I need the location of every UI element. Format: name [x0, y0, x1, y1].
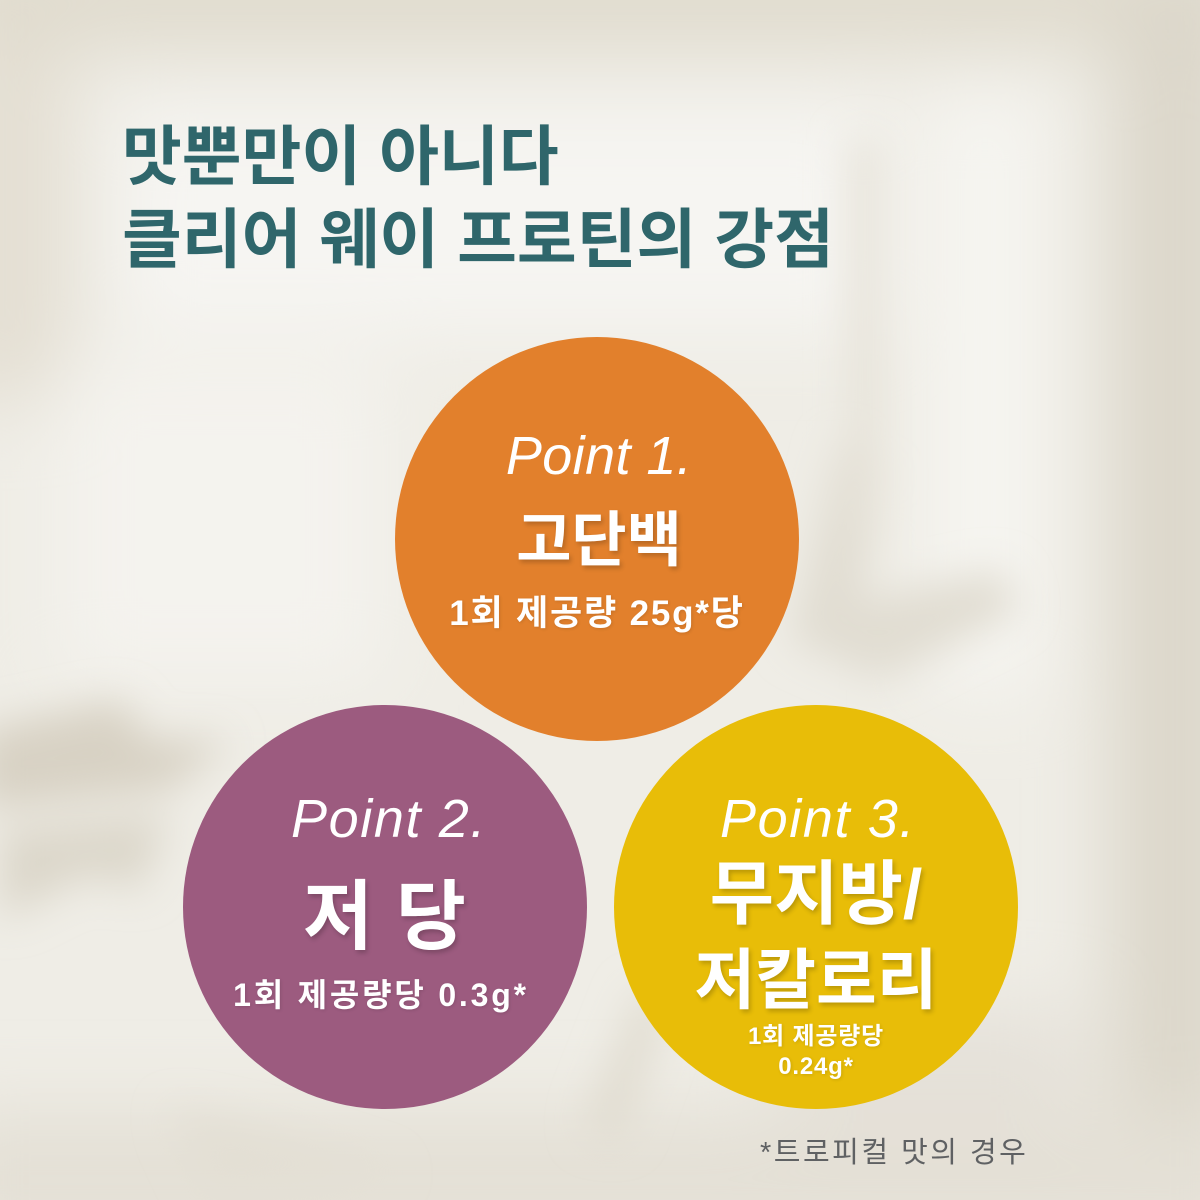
title line 1: 맛뿐만이 아니다 — [122, 120, 559, 193]
point 1 heading: 고단백 — [516, 507, 682, 574]
panel: point 3 fat free low calorie — [614, 705, 1018, 1109]
footnote: *트로피컬 맛의 경우 — [760, 1137, 1028, 1169]
title line 2: 클리어 웨이 프로틴의 강점 — [122, 203, 834, 276]
point 1 label: Point 1. — [506, 426, 692, 486]
point 2 detail: 1회 제공량당 0.3g* — [233, 977, 529, 1013]
point 2 heading: 저 당 — [303, 875, 467, 960]
point 3 detail: 1회 제공량당 — [748, 1023, 884, 1050]
point 3 detail — [748, 1023, 884, 1080]
title — [122, 120, 834, 276]
point 2 label: Point 2. — [291, 789, 487, 849]
point 1 detail: 1회 제공량 25g*당 — [449, 594, 745, 633]
point 3 detail: 0.24g* — [778, 1053, 854, 1080]
point 3 label: Point 3. — [720, 789, 916, 849]
point 3 heading line 1: 무지방/ — [710, 855, 922, 933]
point 3 heading line 2: 저칼로리 — [695, 943, 937, 1017]
panel: point 1 high protein — [395, 337, 799, 741]
panel: point 2 low sugar — [183, 705, 587, 1109]
